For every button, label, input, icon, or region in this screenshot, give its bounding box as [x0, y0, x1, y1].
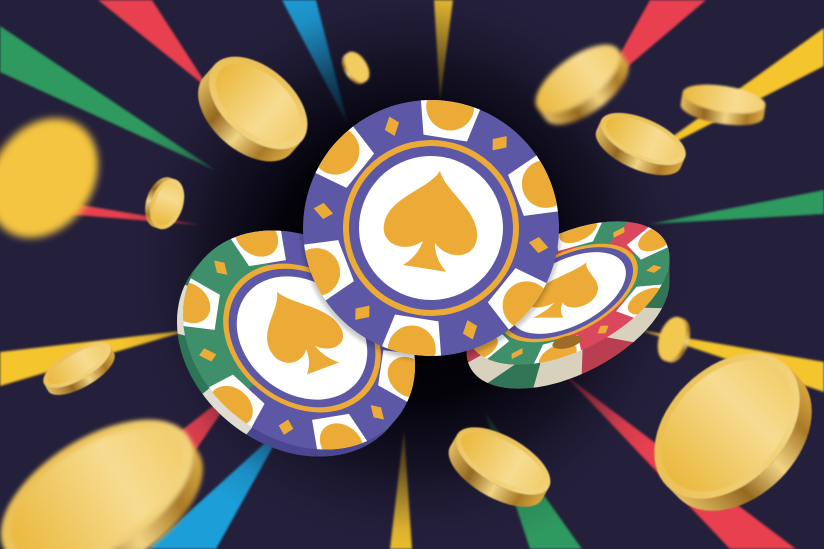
chip side: [177, 263, 393, 456]
coin: small right: [653, 313, 695, 366]
gold diamonds: [297, 104, 565, 352]
white wedges with gold marks: [304, 100, 558, 356]
coin: top-right blurred: [525, 32, 640, 138]
gold ring: [330, 127, 532, 329]
coin: bottom right large: [626, 325, 824, 539]
coin: bottom center: [438, 414, 561, 520]
poker chip: green and purple, tilted: [177, 230, 415, 456]
coin: small left: [139, 173, 190, 234]
spade icon: [378, 163, 486, 276]
chip face: [474, 221, 670, 365]
coin: far-left blurred: [0, 97, 121, 259]
coin: upper right sharp: [588, 102, 693, 186]
coin: top-left: [181, 39, 325, 180]
chip center: [191, 233, 413, 443]
coin: small top: [337, 47, 374, 88]
center circle: [349, 146, 513, 310]
poker chip: red and green, tilted: [466, 221, 670, 389]
coin: lower left small: [37, 333, 121, 404]
brown mark on chip edge: [551, 333, 583, 351]
shadow of purple chip: [301, 101, 561, 361]
coin: bottom-left blurred: [0, 389, 228, 549]
poker chip: purple, center: [303, 100, 559, 356]
chip face: [182, 230, 415, 450]
coin: far-right blurred: [679, 80, 768, 130]
chip disc: [285, 82, 577, 374]
chip side: [456, 201, 680, 412]
